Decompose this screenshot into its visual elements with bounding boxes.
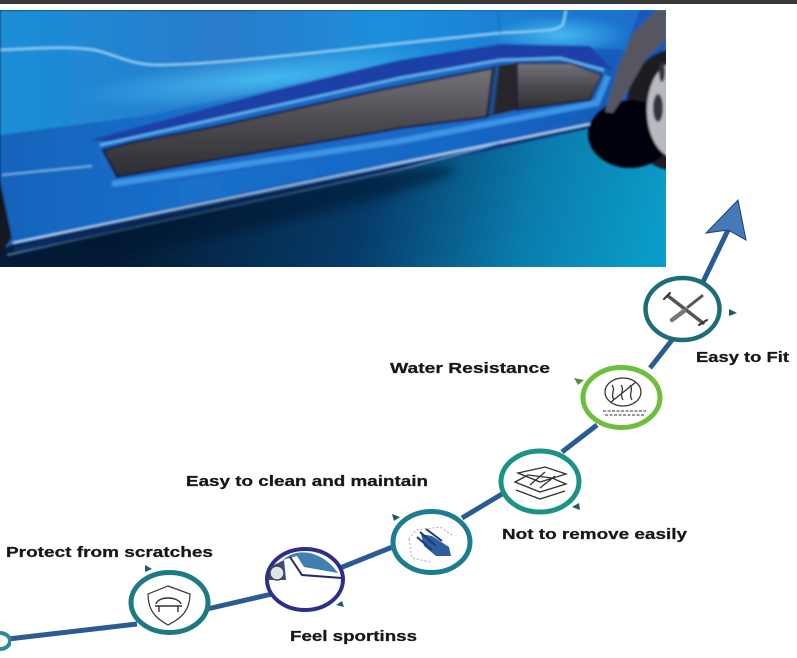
label: Feel sportinss: Feel sportinss: [290, 628, 417, 645]
icon: arrowhead: [706, 200, 746, 240]
step 6: tools icon: [646, 278, 720, 340]
icon: layered sheets: [515, 467, 566, 499]
front edge: [0, 180, 12, 255]
photo: blue car side with door moulding: [0, 10, 666, 267]
start marker ring: [0, 633, 10, 649]
door moulding: black trim rear: [517, 63, 602, 110]
door moulding: door gap: [487, 63, 517, 117]
door moulding: blue surround: [102, 68, 605, 178]
sill lines: [14, 126, 590, 249]
label: Easy to clean and maintain: Easy to clean and maintain: [186, 473, 428, 490]
rim: [644, 62, 666, 158]
label: Not to remove easily: Not to remove easily: [502, 526, 688, 543]
top dark bar: [0, 0, 797, 4]
icon: crossed wrench and screwdriver: [664, 293, 707, 325]
step 4: layers icon: [501, 451, 579, 512]
icon: car detail: [268, 552, 342, 580]
step 1: protect icon: [131, 572, 208, 632]
step 3: clean icon: [393, 512, 470, 572]
step 5: water resistance icon: [583, 368, 660, 428]
icon: wiping hand: [409, 527, 452, 562]
small pointer triangles: [145, 309, 737, 607]
label: Easy to Fit: Easy to Fit: [696, 349, 789, 366]
progress curve with arrow: [8, 200, 746, 639]
wheel arch: [605, 10, 666, 113]
tyre: [626, 49, 666, 172]
door moulding: black trim front: [103, 68, 493, 177]
label: Water Resistance: Water Resistance: [390, 360, 550, 377]
icon: shield with car: [148, 586, 190, 625]
label: Protect from scratches: Protect from scratches: [6, 544, 213, 561]
step 2: sport car icon: [267, 549, 343, 610]
icon: no water waves: [603, 378, 646, 415]
